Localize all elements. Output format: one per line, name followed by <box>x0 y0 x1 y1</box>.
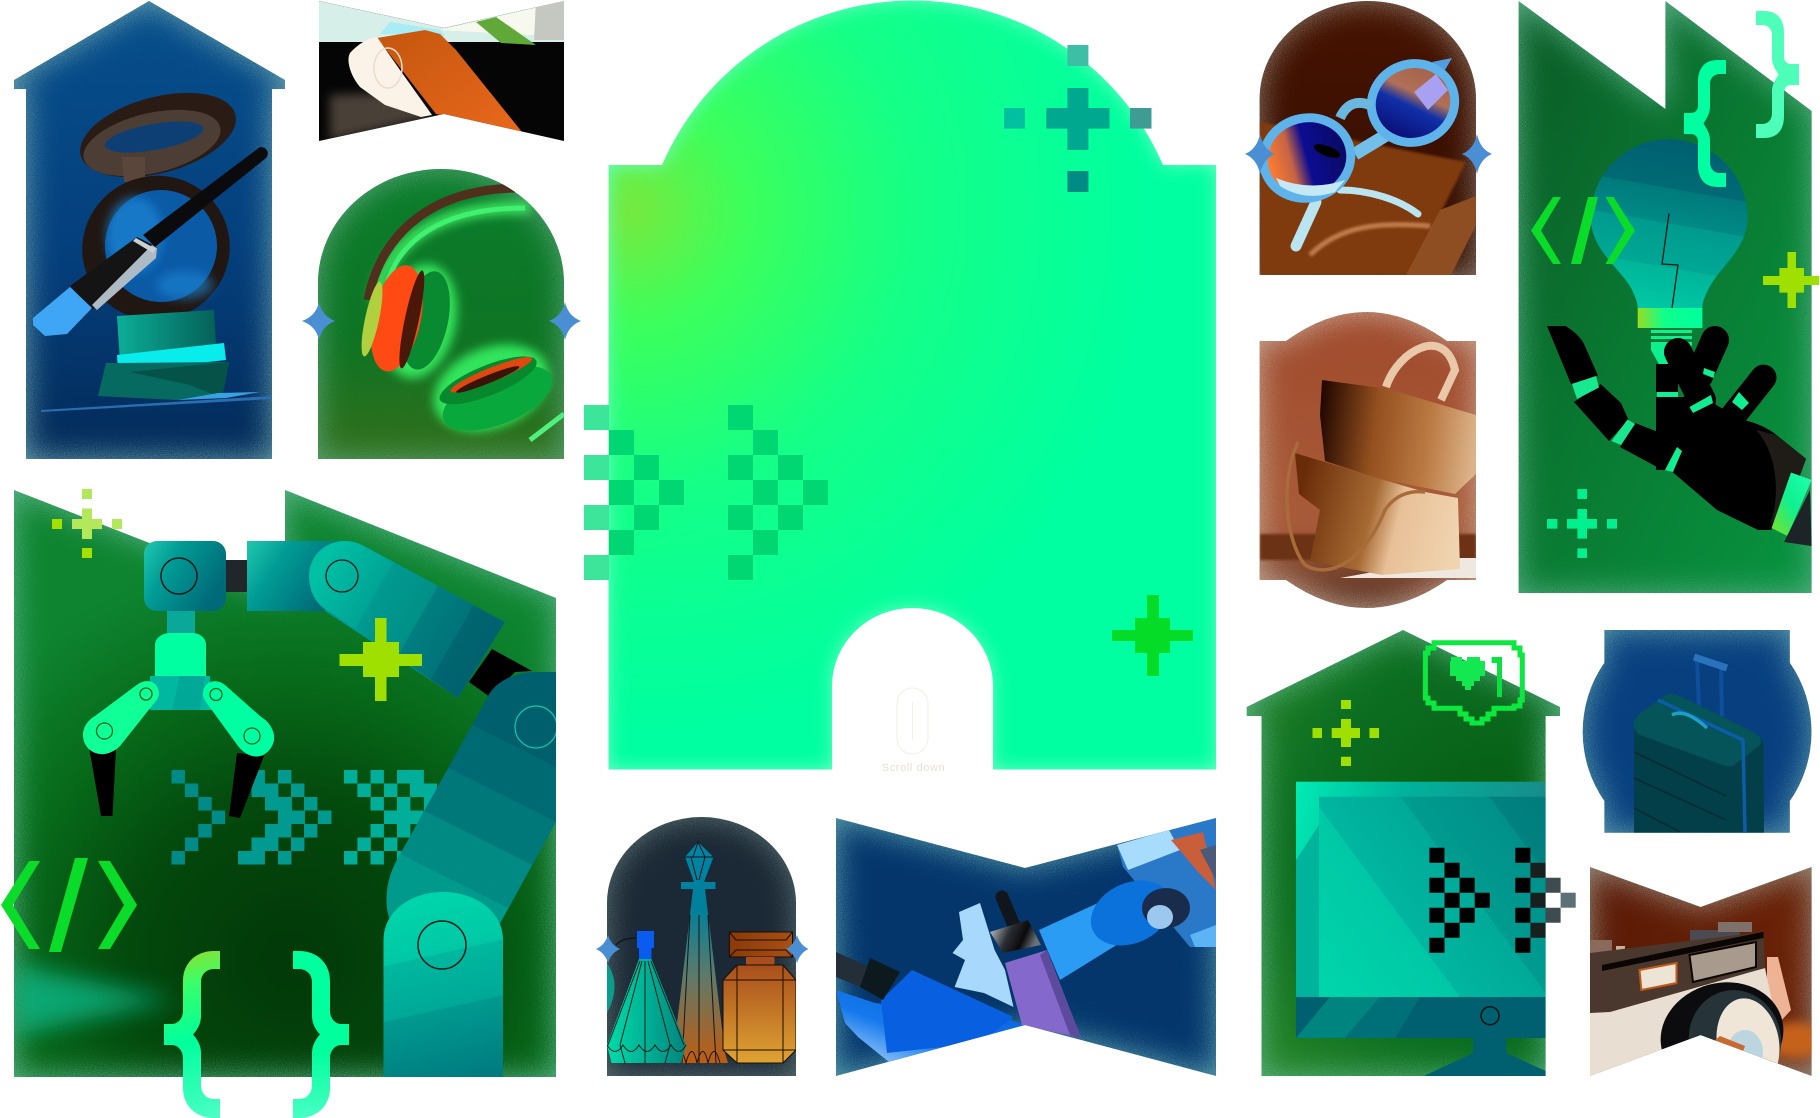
icon: bulb base <box>1638 308 1702 366</box>
icon: monitor power button <box>1481 1007 1499 1025</box>
icon: black elbow joint <box>469 649 532 697</box>
icon: gripper neck and dome <box>150 611 212 710</box>
icon: camera body <box>1590 932 1780 1076</box>
icon: large lime sparkle <box>340 618 422 701</box>
icon: top right jar <box>1117 818 1216 947</box>
panel: robot arm <box>0 480 560 1118</box>
icon: left gripper arm <box>83 681 159 754</box>
icon: scroll mouse <box>897 688 928 754</box>
icon: upper arm <box>247 541 505 698</box>
panel: camera bowtie <box>1585 860 1820 1101</box>
icon: green tape stripe <box>476 17 536 45</box>
icon: camera top dials <box>1590 922 1752 968</box>
icon: robot head block <box>144 541 226 611</box>
icon: green plus sparkle <box>1112 595 1193 676</box>
icon: code angle brackets <box>1 858 137 952</box>
icon: curly brace open <box>1684 60 1726 187</box>
icon: black link between head and arm <box>226 560 248 592</box>
icon: small lime pixel sparkle <box>52 489 122 558</box>
icon: hand joints <box>1572 368 1749 472</box>
icon: black pixel chevrons <box>1429 848 1530 953</box>
icon: spark left of sunglasses <box>1245 134 1275 174</box>
icon: stacked stones <box>98 310 260 400</box>
icon: lower bag <box>1295 453 1460 575</box>
icon: lime pixel sparkle <box>1312 700 1379 766</box>
icon: arm base <box>384 892 503 1077</box>
icon: lower left bottle <box>836 952 1026 1062</box>
icon: right ear cup <box>427 338 555 438</box>
icon: left ear cup <box>362 258 464 385</box>
icon: fading pixel chevrons <box>1530 863 1576 938</box>
icon: spark right of perfume <box>786 935 808 963</box>
icon: floor line <box>41 396 272 412</box>
background: sawtooth green <box>0 480 560 1080</box>
icon: shelf <box>1260 534 1476 578</box>
text: scroll down: Scroll down <box>882 762 945 774</box>
panel: tape bowtie <box>319 0 565 142</box>
icon: lower arm <box>386 672 557 928</box>
icon: curly brace close <box>1756 11 1799 138</box>
icon: camera lens <box>1649 969 1795 1101</box>
icon: headband <box>368 188 530 300</box>
icon: right black finger <box>229 753 264 818</box>
icon: spark right of headphones <box>549 302 581 340</box>
panel: monitor house <box>1240 625 1565 1080</box>
panel: handbag <box>1255 280 1480 620</box>
panel: suitcase <box>1575 625 1820 840</box>
icon: bag strap <box>1287 442 1425 570</box>
panel: perfume arch <box>600 810 800 1080</box>
icon: camera strap lug <box>1767 957 1791 1022</box>
hero arch fill <box>600 0 1225 775</box>
icon: pixel chevrons <box>172 770 437 864</box>
panel: sunglasses arch <box>1254 0 1480 280</box>
icon: right gripper arm <box>203 681 274 757</box>
icon: pixel chevrons left <box>609 430 684 555</box>
icon: left curly brace <box>164 951 220 1118</box>
icon: pixel heart <box>1450 657 1485 690</box>
icon: spark left of perfume <box>596 935 620 963</box>
icon: wrist band <box>1772 472 1812 536</box>
icon: chevron overhang cells <box>584 405 609 580</box>
icon: filament <box>1662 214 1678 308</box>
panel: serums bowtie <box>830 810 1220 1080</box>
icon: pixel speech bubble <box>1425 643 1522 723</box>
icon: light bulb globe <box>1591 139 1748 308</box>
icon: mint pixel sparkle <box>1547 489 1617 558</box>
icon: left black finger <box>89 747 116 816</box>
icon: monitor stand <box>1424 1038 1546 1076</box>
icon: right curly brace <box>293 951 349 1118</box>
icon: spark right of sunglasses <box>1462 134 1492 174</box>
icon: monitor screen <box>1319 797 1546 997</box>
icon: tape roll <box>348 37 432 117</box>
icon: sunglasses <box>1254 52 1466 246</box>
panel: headphones arch <box>310 160 570 460</box>
icon: upper bag <box>1320 380 1476 494</box>
panel: makeup house <box>14 1 285 459</box>
panel: hero arch <box>584 0 1225 775</box>
icon: pale bottle silhouette <box>952 903 1014 1007</box>
icon: monitor frame <box>1296 782 1546 1038</box>
icon: dropper <box>990 897 1041 953</box>
icon: robot hand <box>1547 326 1812 546</box>
icon: left code brackets <box>1531 197 1635 264</box>
icon: teal pixel sparkle <box>1004 45 1152 192</box>
icon: table surface <box>1260 122 1476 275</box>
icon: orange tape <box>377 30 522 132</box>
icon: compact mirror lid <box>80 92 236 182</box>
icon: amber bottle <box>723 932 796 1063</box>
icon: suitcase body <box>1634 694 1764 833</box>
icon: lime sparkle on bulb panel <box>1763 252 1819 308</box>
icon: suitcase handle <box>1694 657 1727 716</box>
icon: long clear bottle <box>1039 868 1190 980</box>
icon: teal atomiser bottle <box>607 959 686 1063</box>
icon: makeup brush <box>33 147 268 336</box>
icon: compact powder pan <box>82 176 230 316</box>
icon: atomiser cap <box>616 931 654 959</box>
icon: pixel count mark <box>1492 657 1502 697</box>
icon: purple bottle <box>1005 950 1081 1038</box>
icon: pixel chevrons right <box>728 405 828 580</box>
panel: light bulb <box>1510 0 1820 600</box>
icon: tall bottle <box>673 842 728 1063</box>
icon: bag handle <box>1386 346 1455 400</box>
icon: spark left of headphones <box>302 302 335 340</box>
